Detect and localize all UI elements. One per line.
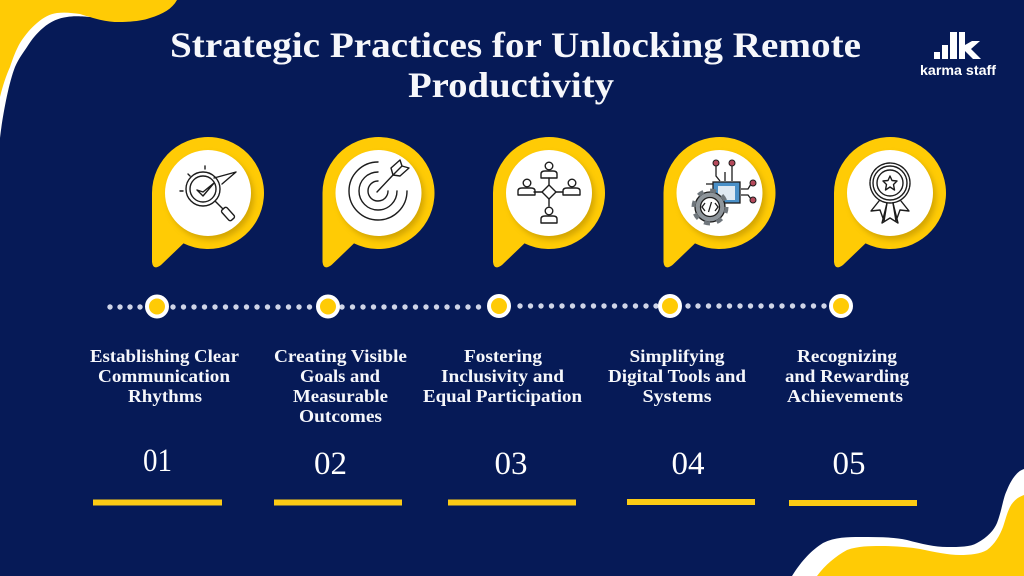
step numbers: 01 [143,443,172,479]
icon: target and arrow [349,160,409,220]
step 3 label [423,346,582,406]
pin 1: magnifier with check icon [152,137,264,267]
step 2 label [274,346,407,426]
step 4 label: Simplifying [630,346,725,366]
step 3 label: Equal Participation [423,386,582,406]
step 4 label [608,346,746,406]
pin 5: award ribbon icon [834,137,946,267]
logo: karma staff [920,32,996,78]
step 3 label: Fostering [464,346,542,366]
step 2 label: Outcomes [299,406,382,426]
icon: circuit chip and code gear [694,160,756,224]
icon: award rosette [870,163,910,223]
icon: magnifier check [180,166,236,222]
step 1 label: Rhythms [128,386,202,406]
step 2 label: Goals and [300,366,380,386]
step 1 label: Communication [98,366,230,386]
step 2 label: Measurable [293,386,388,406]
pin 3: people network icon [493,137,605,267]
step 3 label: Inclusivity and [441,366,564,386]
icon: people network [518,162,580,223]
title: Strategic Practices for Unlocking Remote [170,25,861,65]
step numbers: 05 [832,446,866,482]
step numbers [143,443,866,482]
step numbers: 03 [494,446,528,482]
logo: karma staff: karma staff [920,62,996,78]
decorative wave: bottom right [792,469,1024,576]
step 5 label: Achievements [787,386,903,406]
step underline bars [93,499,917,506]
step numbers: 02 [314,446,347,482]
step 5 label: Recognizing [797,346,897,366]
step 1 label [90,346,239,406]
pin 2: target icon [322,137,434,267]
pin 4: chip and gear icon [664,137,776,267]
decorative wave: top left [0,0,177,138]
step 5 label: and Rewarding [785,366,909,386]
step 2 label: Creating Visible [274,346,407,366]
title: Productivity [408,65,614,105]
step 4 label: Digital Tools and [608,366,746,386]
step 5 label [785,346,909,406]
title [170,25,861,105]
timeline dots [107,303,827,310]
step numbers: 04 [672,446,704,482]
step 4 label: Systems [642,386,712,406]
step 1 label: Establishing Clear [90,346,239,366]
timeline markers [147,296,851,316]
